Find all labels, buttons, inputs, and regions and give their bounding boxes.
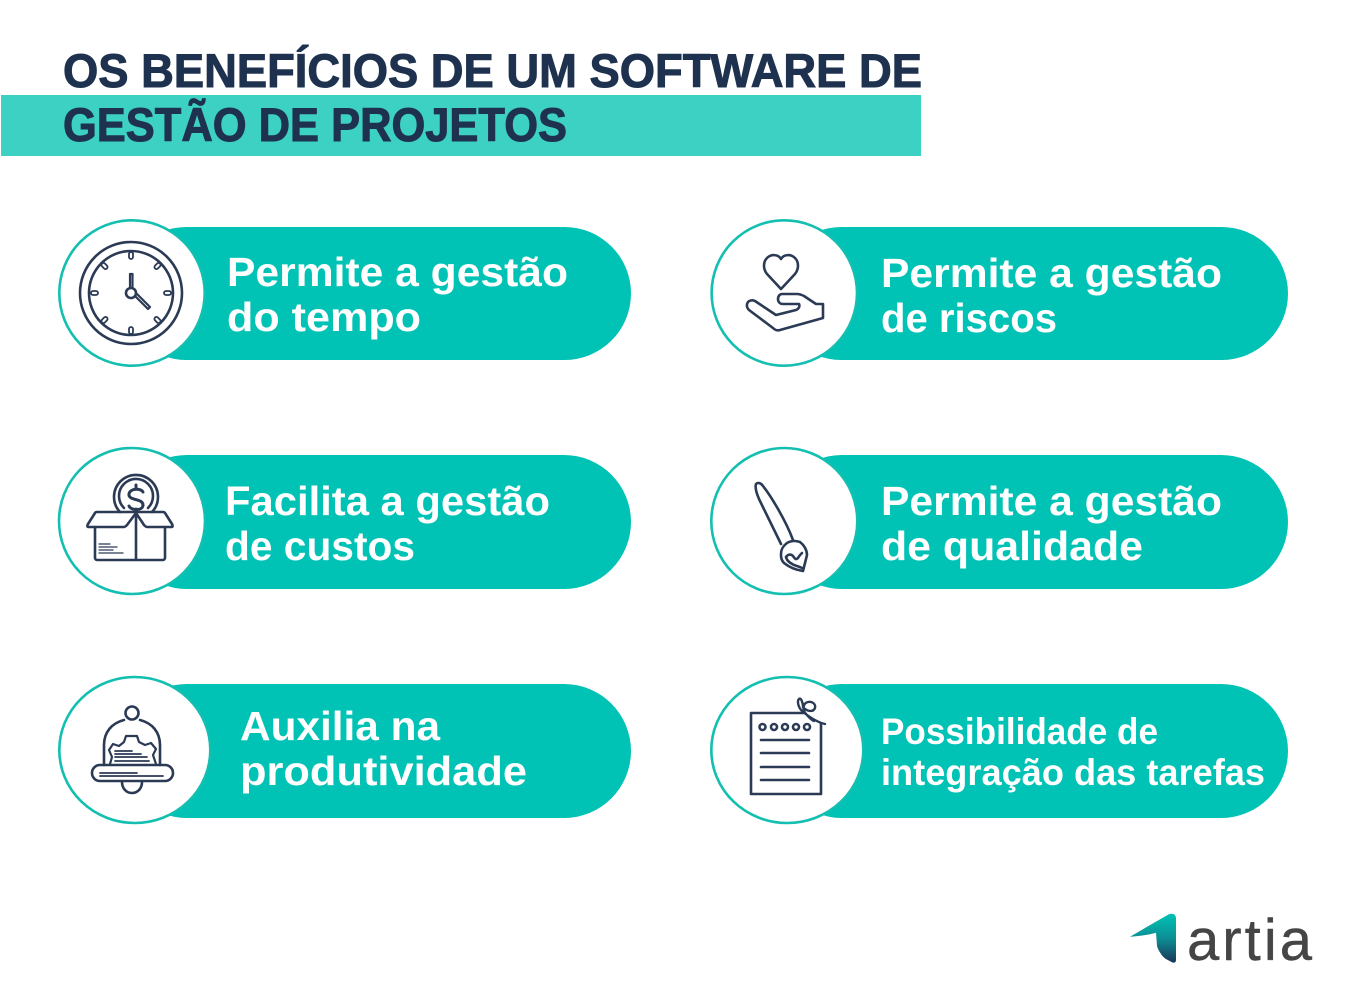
- label: produtividade: [240, 703, 527, 794]
- panel: gestão de riscos: [712, 220, 1288, 366]
- icon: paintbrush: [756, 483, 807, 571]
- label: gestão do tempo: [227, 249, 568, 340]
- icon: money box: [87, 475, 173, 560]
- label: gestão do tempo: do tempo: [227, 294, 421, 340]
- icon: bell with gear: [92, 706, 173, 793]
- icon: clock: [80, 242, 182, 344]
- title banner: [1, 95, 921, 156]
- title: OS BENEFÍCIOS DE UM SOFTWARE DE: [63, 44, 922, 97]
- panel: produtividade: [59, 677, 631, 823]
- label: gestão de riscos: de riscos: [881, 295, 1057, 341]
- label: gestão de custos: Facilita a gestão: [225, 478, 550, 524]
- icon: notepad: [751, 699, 825, 794]
- label: produtividade: Auxilia na: [240, 703, 441, 749]
- label: gestão do tempo: Permite a gestão: [227, 249, 568, 295]
- panel: gestão do tempo: [59, 220, 631, 366]
- label: integração das tarefas: [881, 711, 1265, 793]
- panel: integração das tarefas: [711, 677, 1288, 823]
- panel: gestão de qualidade: [711, 448, 1288, 594]
- label: gestão de custos: [225, 478, 550, 569]
- title: [63, 44, 922, 151]
- icon: heart in hand: [747, 255, 823, 330]
- logo mark: [1130, 914, 1176, 963]
- panel: gestão de custos: [59, 448, 631, 594]
- wordmark: artia: [1187, 908, 1313, 973]
- label: produtividade: produtividade: [240, 748, 527, 794]
- label: gestão de riscos: Permite a gestão: [881, 250, 1222, 296]
- title: GESTÃO DE PROJETOS: [63, 98, 567, 151]
- label: gestão de qualidade: [881, 478, 1222, 569]
- logo: artia: [1130, 908, 1313, 973]
- label: gestão de riscos: [881, 250, 1222, 341]
- label: gestão de qualidade: Permite a gestão: [881, 478, 1222, 524]
- label: gestão de qualidade: de qualidade: [881, 523, 1143, 569]
- label: integração das tarefas: Possibilidade de: [881, 711, 1158, 752]
- label: gestão de custos: de custos: [225, 523, 415, 569]
- label: integração das tarefas: integração das tarefas: [881, 752, 1265, 793]
